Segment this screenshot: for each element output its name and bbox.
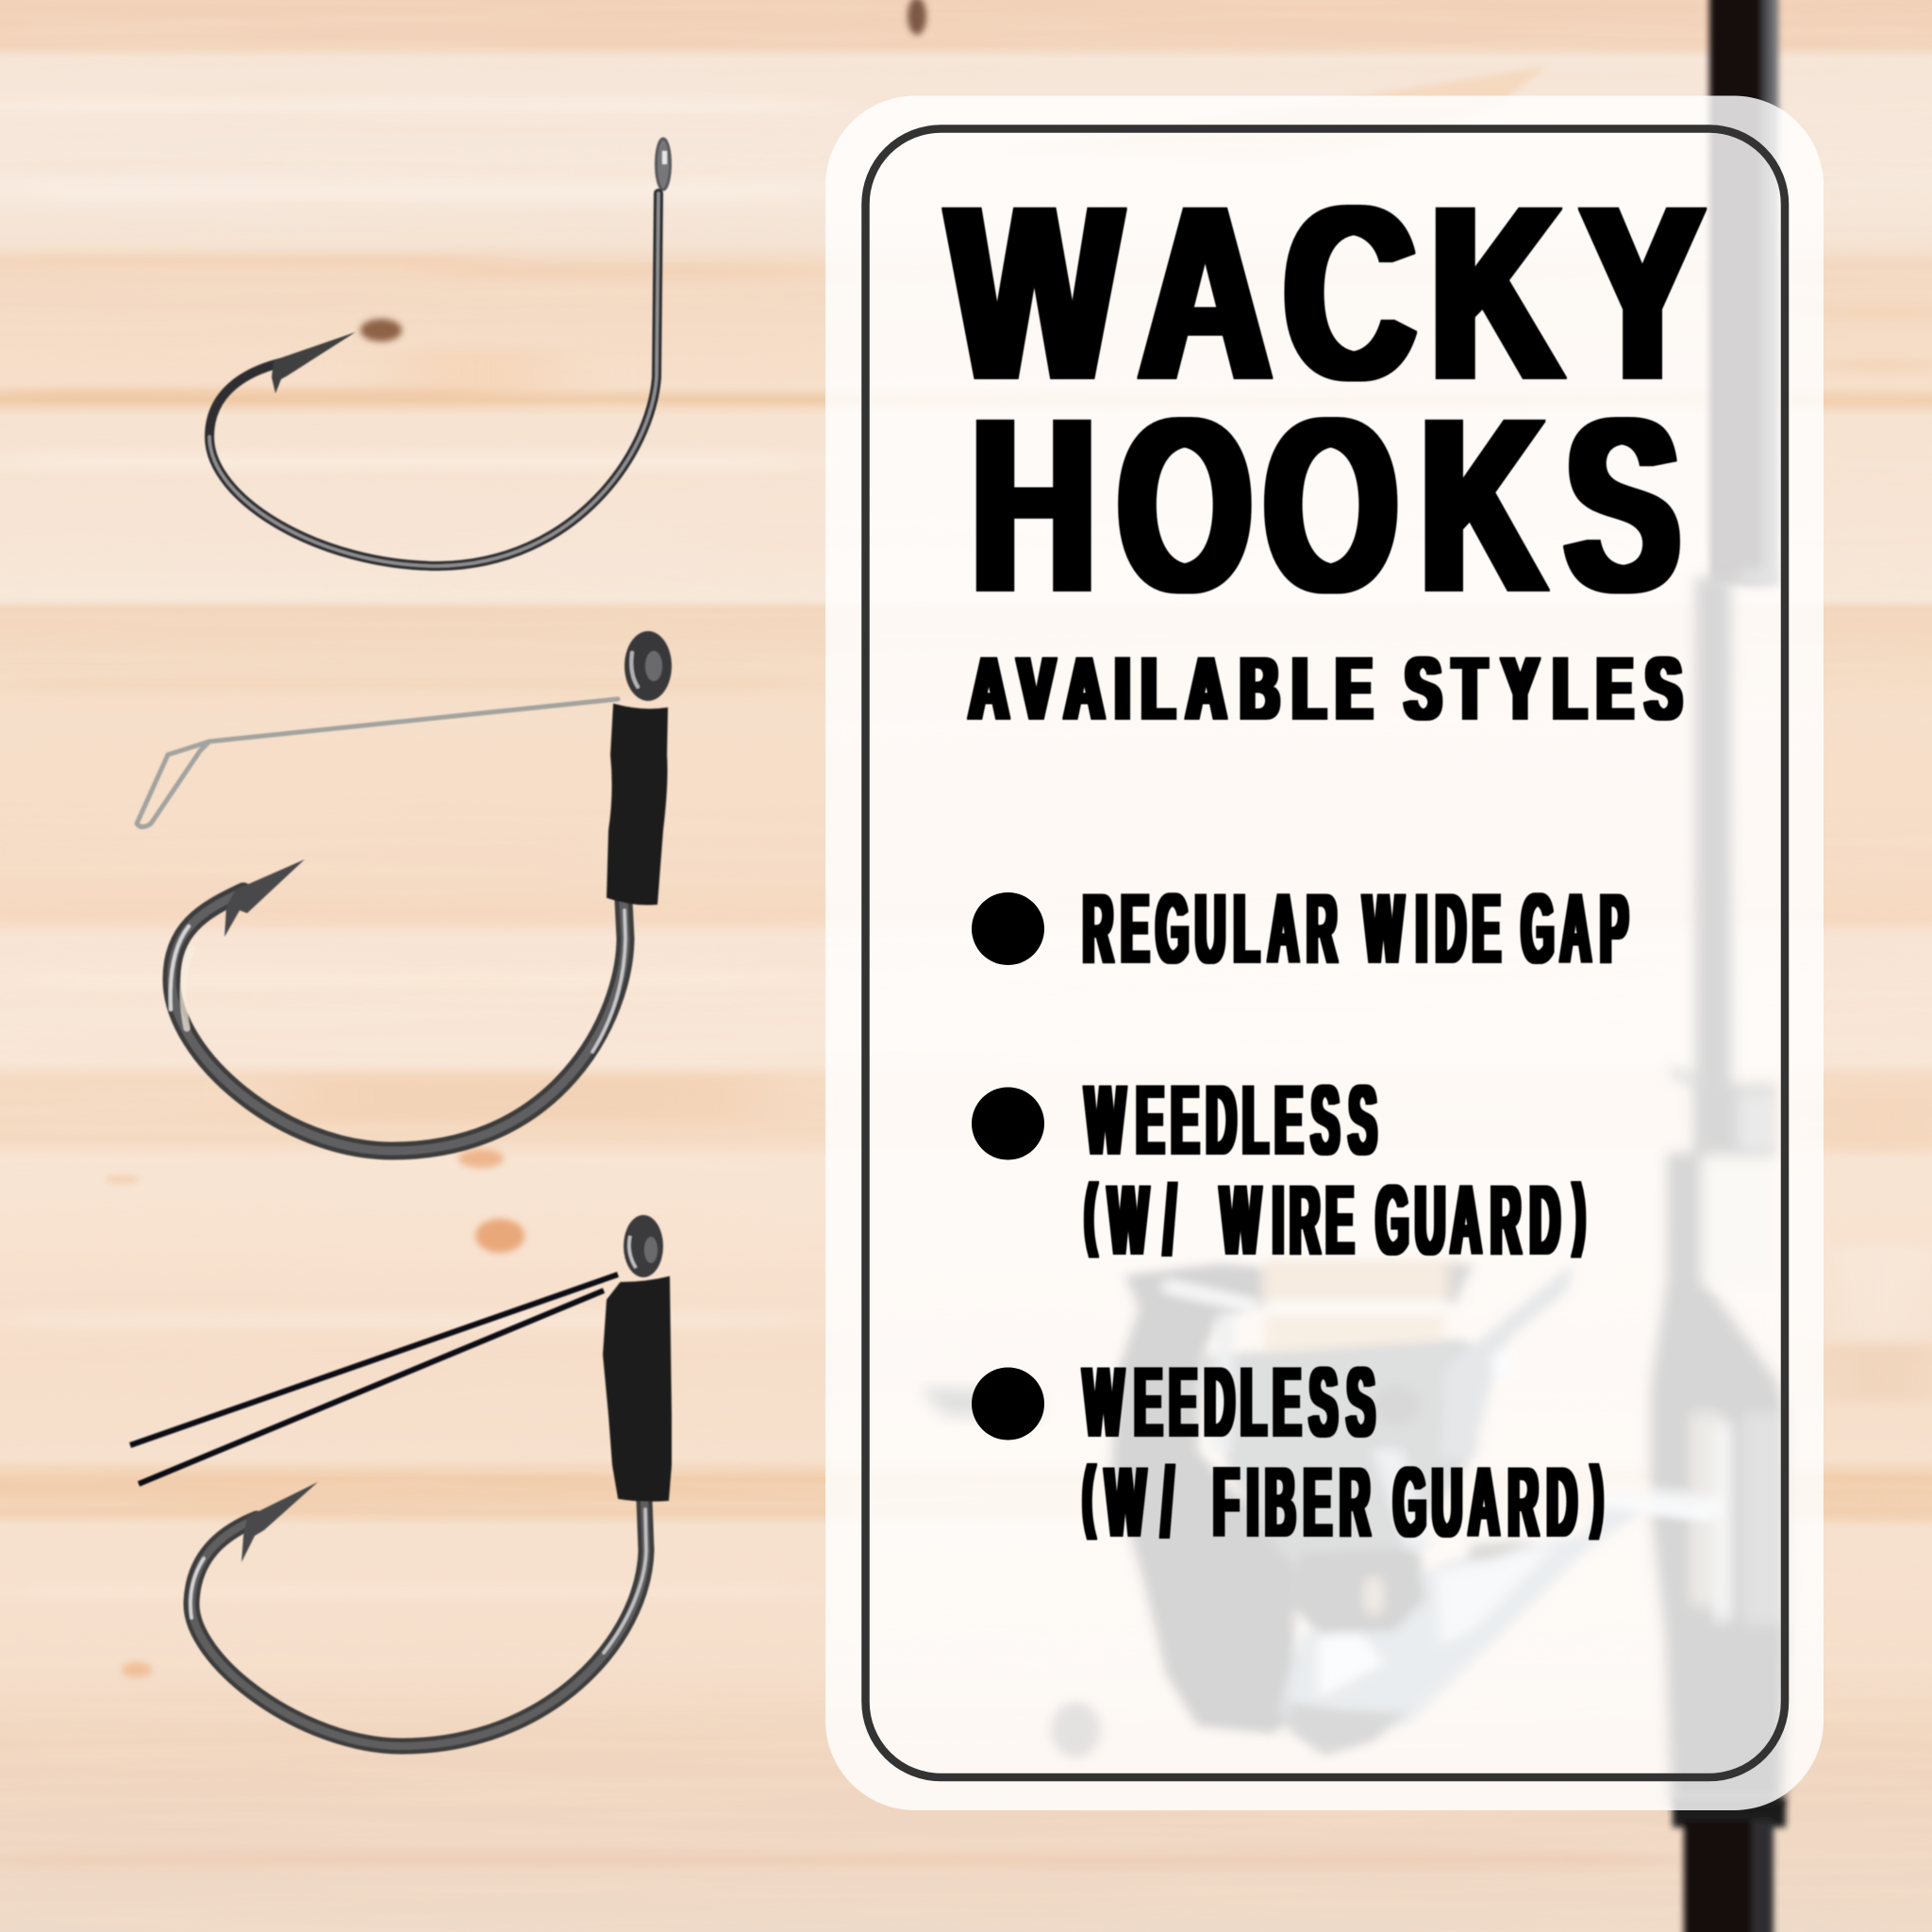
panel: inner border <box>866 128 1785 1777</box>
heat-shrink sleeve <box>608 705 667 904</box>
list item: regular wide gap: REGULAR WIDE GAP <box>1083 874 1628 983</box>
title: WACKY <box>948 154 1704 431</box>
heat-shrink sleeve <box>604 1277 671 1501</box>
list item: weedless with fiber guard: WEEDLESS <box>1083 1347 1374 1457</box>
hook eye <box>624 1215 663 1277</box>
list item: weedless with wire guard <box>972 1065 1585 1274</box>
hook wire <box>171 859 625 1151</box>
list item: weedless with fiber guard: (W/ FIBER GUARD) <box>1083 1447 1603 1557</box>
hook: regular wide gap <box>209 139 670 566</box>
list item: weedless with fiber guard <box>972 1347 1603 1557</box>
hook wire <box>191 1482 646 1746</box>
panel: translucent white card <box>825 96 1824 1810</box>
wire guard <box>137 699 618 826</box>
hook: fiber guard <box>130 1215 671 1746</box>
fishing rod and reel behind panel <box>920 0 1786 1932</box>
list item: weedless with wire guard: WEEDLESS <box>1085 1065 1376 1174</box>
list item: weedless with wire guard: (W/ WIRE GUARD) <box>1085 1165 1585 1274</box>
hook: wire guard <box>137 631 672 1151</box>
title: HOOKS <box>972 366 1680 643</box>
subtitle: AVAILABLE STYLES <box>970 641 1681 739</box>
title <box>948 154 1704 643</box>
fiber guard <box>130 1274 618 1484</box>
hook eye <box>625 631 672 701</box>
